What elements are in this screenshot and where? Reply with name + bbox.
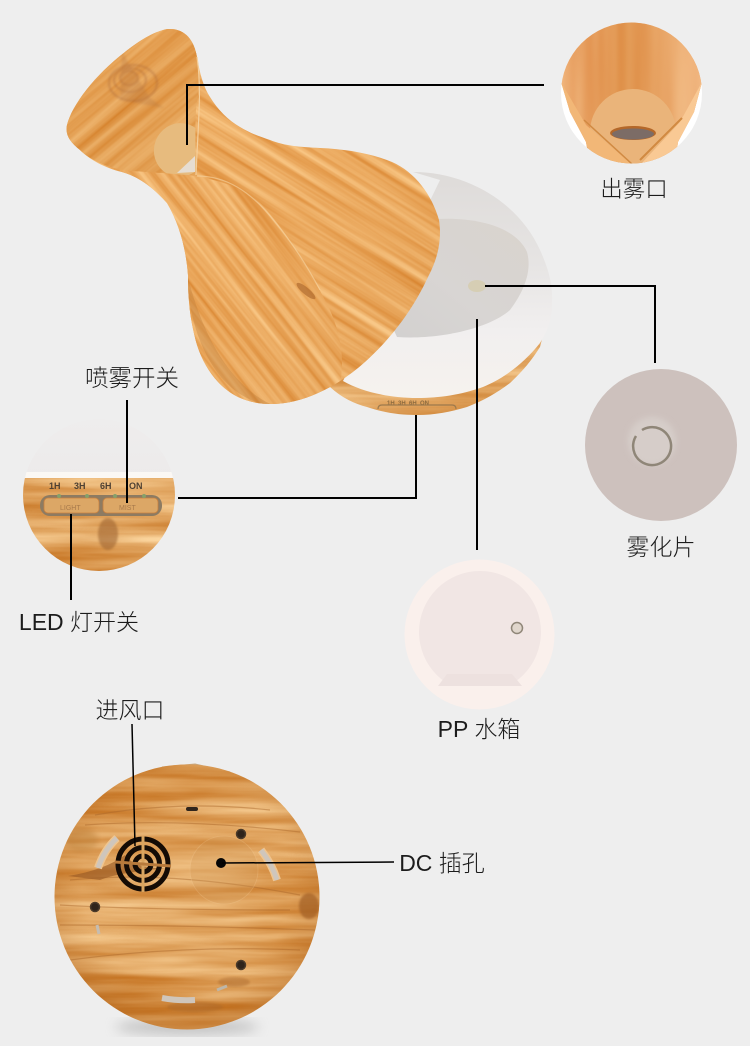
lip crease xyxy=(196,57,199,175)
panel top xyxy=(23,419,175,571)
label: atomizer plate: 雾化片 xyxy=(626,534,696,560)
wooden ball xyxy=(50,760,325,1035)
button LIGHT xyxy=(44,498,99,513)
time labels: 1H xyxy=(49,481,61,491)
atomizer ring xyxy=(633,427,671,465)
plate halo xyxy=(628,417,676,465)
white band xyxy=(20,472,180,478)
button LIGHT: LIGHT xyxy=(60,505,81,512)
white disc xyxy=(561,22,702,164)
screws xyxy=(90,830,246,970)
detail: control panel xyxy=(20,400,180,600)
label: air intake: 进风口 xyxy=(96,697,164,723)
panel wood xyxy=(20,472,180,574)
DC socket xyxy=(216,858,226,868)
inner lip xyxy=(66,29,198,176)
plate disc xyxy=(585,369,737,521)
mist outlet slit xyxy=(177,156,195,173)
base view xyxy=(50,724,394,1035)
outlet hole xyxy=(610,126,656,140)
fold seam xyxy=(197,176,320,290)
small slit xyxy=(186,807,198,811)
front lip right xyxy=(642,84,701,162)
printed labels on base: 1H 3H 6H ON xyxy=(387,401,429,407)
recess xyxy=(190,836,258,904)
knot xyxy=(98,518,118,550)
atomizer dot in bowl xyxy=(468,280,486,292)
inner well xyxy=(380,219,529,337)
tank front wall xyxy=(432,686,528,708)
DC pointer xyxy=(222,862,394,863)
lip knot xyxy=(109,52,164,108)
air intake pointer xyxy=(132,724,135,846)
detail: PP water tank xyxy=(404,560,554,710)
label: LED switch: LED 灯开关 xyxy=(19,609,139,635)
label: PP water tank: PP 水箱 xyxy=(438,716,520,742)
detail: control panel: ON xyxy=(129,481,142,491)
dark grain strokes xyxy=(60,806,315,960)
tank atomizer dot xyxy=(512,622,522,634)
detail: control panel: 6H xyxy=(100,481,112,491)
tank interior xyxy=(419,571,541,693)
front lip left xyxy=(561,82,632,165)
callout lines xyxy=(178,85,655,550)
cover grain left side xyxy=(120,170,342,404)
ground shadow xyxy=(115,1019,259,1035)
main wooden diffuser cover xyxy=(66,29,440,404)
button MIST: MIST xyxy=(119,505,136,512)
top tabs xyxy=(162,765,230,773)
label: mist outlet: 出雾口 xyxy=(600,177,668,202)
detail: mist outlet xyxy=(561,22,702,164)
wood interior xyxy=(562,22,702,164)
knot on side xyxy=(295,281,317,301)
button frame xyxy=(40,495,162,516)
button MIST xyxy=(103,498,158,513)
knots xyxy=(68,855,170,880)
button outline on base xyxy=(378,405,456,409)
cover grain right side xyxy=(66,29,440,404)
tank rim xyxy=(404,560,554,710)
detail: atomizer plate xyxy=(585,369,737,521)
label: DC socket: DC 插孔 xyxy=(399,850,485,876)
water tank and base xyxy=(330,172,550,415)
white bowl xyxy=(343,172,552,398)
air intake grille xyxy=(115,836,171,892)
mist outlet disc xyxy=(154,123,196,175)
cover shading xyxy=(60,20,450,410)
light slots xyxy=(97,838,277,1000)
LED dots xyxy=(57,494,146,498)
cover lower edge shadow xyxy=(188,280,270,404)
label: mist switch: 喷雾开关 xyxy=(85,365,179,391)
detail: control panel: 3H xyxy=(74,481,86,491)
outlet disc xyxy=(590,89,674,164)
switch pointer lines xyxy=(71,400,127,600)
wood base ring xyxy=(330,340,542,415)
